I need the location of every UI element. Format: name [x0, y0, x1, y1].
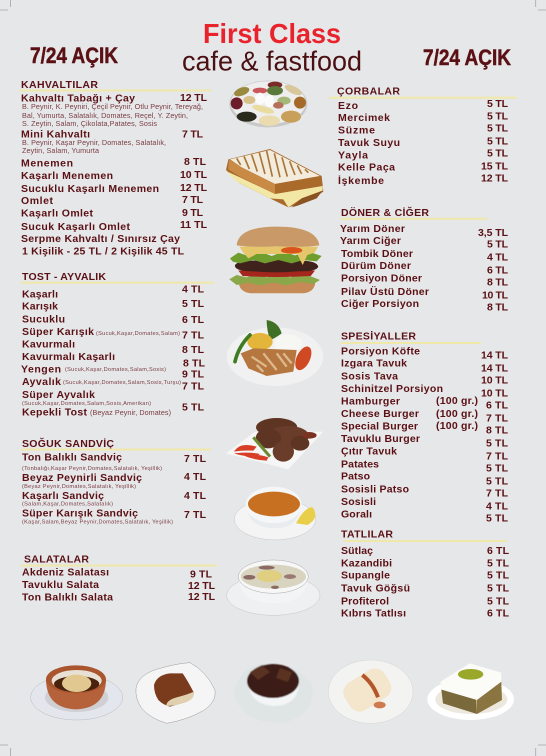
çorba prices: 5 TL [487, 136, 509, 148]
icon: hamburger [229, 227, 322, 293]
tost items [21, 289, 181, 419]
döner prices: 8 TL [487, 277, 509, 289]
spesiyal items: Sosisli Patso [341, 484, 409, 496]
spesiyal prices: 10 TL [481, 375, 509, 387]
tost prices: 5 TL [182, 298, 205, 310]
spesiyal items: (100 gr.) [436, 420, 478, 432]
kahvaltılar items: Zeytin, Salam, Yumurta [22, 146, 99, 155]
kahvaltılar prices: 11 TL [180, 219, 208, 231]
spesiyal prices: 10 TL [481, 388, 509, 400]
tost items: Ayvalık [22, 376, 61, 388]
tost prices: 7 TL [182, 381, 205, 393]
sandviç prices: 4 TL [184, 471, 207, 483]
heading: çorbalar: ÇORBALAR [337, 86, 400, 98]
çorba items: Tavuk Suyu [338, 137, 400, 149]
kahvaltılar items: Sucuklu Kaşarlı Menemen [21, 183, 159, 195]
spesiyal items: Tavuklu Burger [341, 433, 420, 445]
panel: soğuk sandviç [21, 437, 211, 526]
panel: tatlılar [341, 528, 510, 620]
kahvaltılar items: 1 Kişilik - 25 TL / 2 Kişilik 45 TL [22, 246, 185, 258]
çorba prices: 5 TL [487, 98, 509, 110]
sandviç prices: 7 TL [184, 453, 207, 465]
sandviç items: (Tonbalığı,Kaşar Peynir,Domates,Salatalık, Yeşillik) [22, 466, 162, 472]
spesiyal items: (100 gr.) [436, 408, 478, 420]
tatlı items [341, 545, 410, 620]
çorba prices: 12 TL [481, 173, 509, 185]
döner prices: 10 TL [482, 290, 509, 302]
kahvaltılar items: Kaşarlı Menemen [21, 170, 113, 182]
tatlı prices: 5 TL [487, 595, 510, 607]
panel: döner ciğer [340, 206, 509, 314]
döner items: Pilav Üstü Döner [341, 285, 429, 298]
kahvaltılar items [21, 92, 203, 258]
tatlı items: Sütlaç [341, 545, 373, 557]
spesiyal items: Patso [341, 471, 370, 483]
çorba items: Kelle Paça [338, 162, 395, 174]
tost prices: 6 TL [182, 314, 205, 326]
döner items: Yarım Ciğer [340, 235, 401, 247]
salata prices: 12 TL [188, 580, 216, 592]
kahvaltılar prices [180, 92, 208, 231]
tatlı prices [487, 545, 510, 620]
kahvaltılar items: S. Zeytin, Salam, Çikolata,Patates, Sosis [22, 119, 157, 128]
döner prices: 8 TL [487, 302, 509, 314]
çorba items [338, 100, 400, 187]
kahvaltılar prices: 7 TL [182, 129, 204, 141]
spesiyal items: Sosis Tava [341, 371, 398, 383]
döner prices: 3,5 TL [478, 227, 509, 239]
icon: sütlaç [31, 665, 123, 720]
spesiyal items [341, 346, 478, 521]
spesiyal prices: 5 TL [486, 513, 509, 525]
icon: lentil soup [234, 487, 316, 540]
sandviç prices: 7 TL [184, 509, 207, 521]
kahvaltılar prices: 8 TL [184, 156, 207, 168]
tost items: Sucuklu [22, 314, 65, 326]
heading: salatalar: SALATALAR [24, 554, 89, 566]
tost prices: 8 TL [182, 344, 205, 356]
spesiyal items: Schinitzel Porsiyon [341, 383, 443, 395]
döner items: Tombik Döner [341, 248, 413, 260]
döner items: Porsiyon Döner [341, 273, 422, 285]
tost items: Süper Karışık [22, 326, 94, 338]
kahvaltılar prices: 7 TL [182, 194, 204, 206]
spesiyal items: Special Burger [341, 421, 418, 433]
kahvaltılar items: B. Peynir, K. Peyniri, Çeçil Peynir, Otlu Peynir, Tereyağ, [22, 102, 203, 111]
icon: meatball plate [226, 418, 323, 469]
badge: open 24/7 right: 7/24 AÇIK [423, 45, 512, 70]
kahvaltılar items: Menemen [21, 158, 73, 170]
çorba items: Ezo [338, 100, 358, 112]
döner items [340, 223, 429, 310]
tost items: (Sucuk,Kaşar,Domates,Salam) [96, 331, 180, 337]
tost items: (Sucuk,Kaşar,Domates,Salam,Sosis) [65, 367, 166, 373]
spesiyal items: Izgara Tavuk [341, 358, 407, 370]
icon: tavuk göğsü [328, 660, 413, 723]
title: cafe & fastfood [182, 46, 362, 76]
icon: tripe soup [227, 560, 320, 615]
salata items: Ton Balıklı Salata [22, 592, 113, 604]
kahvaltılar items: Sucuk Kaşarlı Omlet [21, 221, 130, 233]
spesiyal items: Goralı [341, 509, 372, 521]
çorba prices: 5 TL [487, 148, 509, 160]
tatlı items: Supangle [341, 570, 390, 582]
çorba items: Yayla [338, 150, 368, 162]
sandviç prices [184, 453, 207, 521]
döner items: Yarım Döner [340, 223, 405, 235]
tost prices: 9 TL [182, 369, 205, 381]
tost items: (Sucuk,Kaşar,Domates,Salam,Sosis,Amerikan) [22, 401, 151, 407]
tost prices: 8 TL [183, 358, 206, 370]
spesiyal prices: 6 TL [486, 400, 509, 412]
tatlı items: Profiterol [341, 595, 389, 607]
spesiyal prices: 5 TL [486, 476, 509, 488]
kahvaltılar items: Kahvaltı Tabağı + Çay [21, 92, 135, 104]
çorba items: Süzme [338, 125, 375, 137]
tost prices: 4 TL [182, 284, 205, 296]
title: First Class [203, 18, 341, 49]
spesiyal prices: 7 TL [486, 450, 509, 462]
spesiyal prices: 8 TL [486, 425, 509, 437]
tost prices [182, 284, 206, 414]
döner items: Ciğer Porsiyon [341, 298, 419, 310]
tost items: (Beyaz Peynir, Domates) [90, 408, 171, 417]
kahvaltılar items: B. Peynir, Kaşar Peynir, Domates, Salatalık, [22, 138, 166, 147]
tatlı prices: 6 TL [487, 608, 510, 620]
icon: supangle [234, 664, 312, 722]
tost items: Karışık [22, 301, 58, 313]
tost items: Kepekli Tost [22, 407, 88, 419]
spesiyal prices [481, 350, 509, 525]
spesiyal items: (100 gr.) [436, 395, 478, 407]
çorba prices: 5 TL [487, 111, 509, 123]
sandviç items: Beyaz Peynirli Sandviç [22, 472, 142, 484]
spesiyal items: Cheese Burger [341, 408, 419, 420]
sandviç items: Kaşarlı Sandviç [22, 490, 104, 502]
spesiyal prices: 4 TL [486, 501, 509, 513]
icon: kıbrıs tatlısı [427, 663, 514, 720]
sandviç prices: 4 TL [184, 490, 207, 502]
kahvaltılar prices: 12 TL [180, 92, 208, 104]
sandviç items: Süper Karışık Sandviç [22, 508, 138, 520]
sandviç items: Ton Balıklı Sandviç [22, 452, 122, 464]
salata prices: 9 TL [190, 569, 213, 581]
döner prices: 6 TL [487, 265, 509, 277]
tatlı prices: 5 TL [487, 570, 510, 582]
çorba prices [481, 98, 509, 185]
icon: chicken plate [227, 320, 323, 386]
kahvaltılar items: Serpme Kahvaltı / Sınırsız Çay [21, 233, 180, 245]
çorba items: İşkembe [338, 174, 384, 187]
tost items: Kavurmalı Kaşarlı [22, 351, 115, 363]
sandviç items [22, 452, 173, 526]
spesiyal items: Sosisli [341, 496, 376, 508]
spesiyal prices: 5 TL [486, 438, 509, 450]
kahvaltılar items: Kaşarlı Omlet [21, 208, 94, 220]
sandviç items: (Beyaz Peynir,Domates,Salatalık, Yeşillik) [22, 484, 136, 490]
salata items: Tavuklu Salata [22, 579, 99, 591]
tost items: Yengen [21, 364, 61, 376]
panel: spesiyaller [341, 329, 509, 525]
heading: tatlılar: TATLILAR [341, 528, 393, 540]
kahvaltılar prices: 12 TL [180, 182, 208, 194]
tatlı items: Tavuk Göğsü [341, 583, 410, 595]
tatlı prices: 5 TL [487, 583, 510, 595]
tatlı items: Kazandibi [341, 558, 392, 570]
çorba items: Mercimek [338, 112, 390, 124]
salata prices: 12 TL [188, 591, 216, 603]
döner prices: 5 TL [487, 239, 509, 251]
sandviç items: (Kaşar,Salam,Beyaz Peynir,Domates,Salatalık, Yeşillik) [22, 520, 173, 526]
çorba prices: 15 TL [481, 161, 509, 173]
spesiyal prices: 5 TL [486, 462, 509, 474]
panel: tost ayvalık [21, 271, 214, 419]
tost items: (Sucuk,Kaşar,Domates,Salam,Sosis,Turşu) [63, 380, 181, 386]
kahvaltılar prices: 10 TL [180, 169, 208, 181]
spesiyal items: Hamburger [341, 396, 400, 408]
tost prices: 7 TL [182, 330, 205, 342]
spesiyal prices: 14 TL [481, 350, 509, 362]
kahvaltılar prices: 9 TL [182, 207, 204, 219]
sandviç items: (Salam,Kaşar,Domates,Salatalık) [22, 502, 113, 508]
icon: kazandibi [136, 663, 215, 723]
spesiyal items: Çıtır Tavuk [341, 446, 397, 458]
tatlı items: Kıbrıs Tatlısı [341, 608, 406, 620]
kahvaltılar items: Bal, Yumurta, Salatalık, Domates, Reçel, Y. Zeytin, [22, 111, 188, 120]
tost items: Kaşarlı [22, 289, 58, 301]
döner items: Dürüm Döner [341, 260, 411, 272]
döner prices [478, 227, 509, 314]
tatlı prices: 6 TL [487, 545, 510, 557]
heading: döner ciğer: DÖNER & CİĞER [341, 206, 429, 219]
heading: soğuk sandviç: SOĞUK SANDVİÇ [22, 437, 114, 450]
badge: open 24/7 left: 7/24 AÇIK [30, 43, 119, 68]
salata items [22, 567, 113, 604]
kahvaltılar items: Mini Kahvaltı [21, 128, 90, 140]
tost items: Kavurmalı [22, 339, 75, 351]
döner prices: 4 TL [487, 252, 509, 264]
title [182, 18, 362, 76]
spesiyal prices: 7 TL [486, 488, 509, 500]
tatlı prices: 5 TL [487, 558, 510, 570]
heading: kahvaltılar: KAHVALTILAR [21, 79, 98, 91]
heading: spesiyaller: SPESİYALLER [341, 329, 416, 342]
salata prices [188, 569, 216, 603]
spesiyal prices: 7 TL [486, 413, 509, 425]
kahvaltılar items: Omlet [21, 195, 54, 207]
heading: tost ayvalık: TOST - AYVALIK [22, 271, 106, 283]
çorba prices: 5 TL [487, 123, 509, 135]
panel: çorbalar [329, 86, 517, 187]
tost prices: 5 TL [182, 402, 205, 414]
spesiyal items: Patates [341, 459, 379, 471]
spesiyal prices: 14 TL [481, 363, 509, 375]
icon: breakfast plate [229, 81, 307, 127]
panel: kahvaltılar [19, 79, 211, 258]
icon: toasted sandwich [226, 149, 323, 207]
salata items: Akdeniz Salatası [22, 567, 109, 579]
tost items: Süper Ayvalık [22, 389, 95, 401]
spesiyal items: Porsiyon Köfte [341, 346, 420, 358]
panel: salatalar [21, 554, 217, 604]
